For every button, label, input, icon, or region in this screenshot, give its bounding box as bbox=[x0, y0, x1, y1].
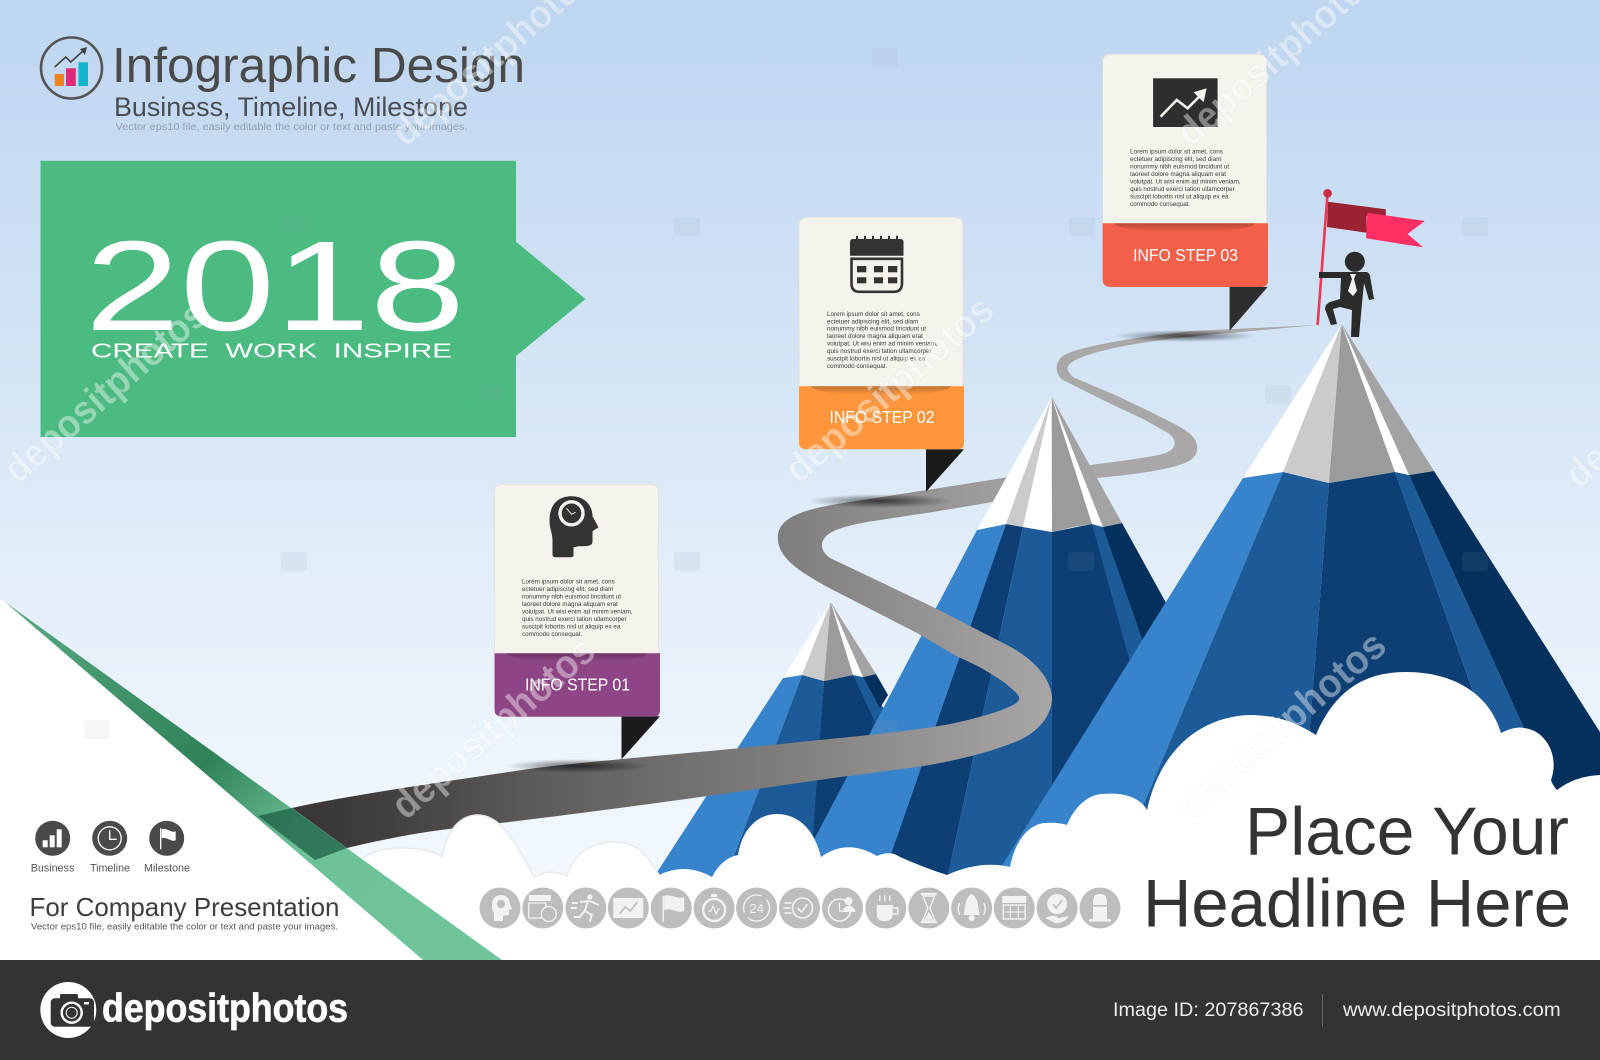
body text: laoreet dolore magna aliquam erat bbox=[827, 333, 923, 340]
card: info step 03 bbox=[1103, 54, 1268, 331]
body text: volutpat. Ut wisi enim ad minim veniam, bbox=[522, 608, 633, 615]
winding road bbox=[292, 325, 1318, 848]
footer bar bbox=[0, 960, 1600, 1060]
icon: calendar bbox=[850, 236, 904, 292]
small mountain bbox=[652, 602, 890, 880]
icon 9: clock with person bbox=[822, 888, 863, 928]
icon 5: flag bbox=[651, 888, 692, 928]
clouds bbox=[340, 672, 1600, 960]
road seen through band bbox=[258, 808, 347, 860]
icon 7: 24 hours bbox=[736, 888, 777, 928]
watermark camera marks bbox=[84, 48, 1488, 739]
body text: ectetuer adipiscing elit, sed diam bbox=[522, 586, 613, 593]
watermark text: depositphotos bbox=[0, 292, 216, 492]
body text: commodo consequat. bbox=[522, 631, 582, 638]
body text: ectetuer adipiscing elit, sed diam bbox=[1130, 156, 1221, 163]
body text: ectetuer adipiscing elit, sed diam bbox=[827, 318, 918, 325]
body text: laoreet dolore magna aliquam erat bbox=[1130, 171, 1226, 178]
step label: INFO STEP 01 bbox=[525, 674, 630, 694]
title: Infographic Design bbox=[112, 39, 525, 93]
icon: businessman bbox=[1319, 252, 1374, 337]
body text: Lorem ipsum dolor sit amet, cons bbox=[827, 311, 920, 318]
icon 15: milestone stone bbox=[1080, 888, 1120, 928]
body text: quis nostrud exerci tation ullamcorper bbox=[827, 348, 932, 355]
big mountain bbox=[993, 324, 1600, 880]
icon 14: hand with clock bbox=[1037, 888, 1078, 928]
icon: flag bbox=[1318, 189, 1425, 325]
row of grey timeline icons bbox=[480, 888, 1120, 928]
white lower left panel bbox=[0, 600, 423, 960]
body text: quis nostrud exerci tation ullamcorper bbox=[1130, 186, 1235, 193]
watermark text: depositphotos bbox=[1168, 623, 1395, 828]
watermark text bbox=[0, 0, 1600, 828]
body text: Lorem ipsum dolor sit amet, cons bbox=[1130, 149, 1223, 156]
body text: Lorem ipsum dolor sit amet, cons bbox=[522, 579, 615, 586]
footer brand name: depositphotos bbox=[102, 986, 348, 1030]
flag and climbing businessman bbox=[1318, 189, 1425, 337]
footer divider bbox=[1322, 994, 1324, 1027]
middle mountain snow cap bbox=[977, 397, 1122, 532]
icon 2: calendar clock bbox=[522, 888, 563, 928]
company presentation heading: For Company Presentation bbox=[30, 892, 340, 922]
body text: nonummy nibh euismod tincidunt ut bbox=[522, 593, 621, 600]
body text: nonummy nibh euismod tincidunt ut bbox=[1130, 163, 1229, 170]
step label: INFO STEP 02 bbox=[830, 407, 934, 427]
small description: Vector eps10 file, easily editable the color or text and paste your images. bbox=[116, 121, 467, 133]
subtitle: Business, Timeline, Milestone bbox=[114, 92, 468, 122]
step label: INFO STEP 03 bbox=[1133, 245, 1238, 265]
body text: volutpat. Ut wisi enim ad minim veniam, bbox=[1130, 178, 1241, 185]
year: 2018 bbox=[85, 215, 465, 358]
label: timeline: Timeline bbox=[90, 863, 130, 875]
body text: suscipit lobortis nisl ut aliquip ex ea bbox=[827, 356, 926, 362]
icon 6: stopwatch bbox=[694, 888, 735, 928]
green year banner bbox=[40, 161, 586, 437]
headline line 2: Headline Here bbox=[1143, 866, 1571, 942]
icon 1: head bbox=[480, 888, 520, 928]
headline line 1: Place Your bbox=[1245, 793, 1569, 869]
footer website: www.depositphotos.com bbox=[1342, 999, 1561, 1021]
green diagonal band bbox=[5, 602, 502, 960]
body text: laoreet dolore magna aliquam erat bbox=[522, 601, 618, 608]
watermark text: depositphotos bbox=[383, 628, 604, 828]
icon 10: coffee cup bbox=[865, 888, 906, 928]
icon 4: chart bbox=[608, 888, 649, 928]
icon 13: calendar bbox=[994, 888, 1035, 928]
pale cloud outline bbox=[360, 815, 659, 877]
body text: quis nostrud exerci tation ullamcorper bbox=[522, 616, 627, 623]
icon 11: hourglass bbox=[908, 888, 949, 928]
label: milestone: Milestone bbox=[144, 863, 190, 875]
icon: growth chart bbox=[1153, 78, 1218, 127]
icon 3: runner bbox=[565, 888, 606, 928]
middle mountain body bbox=[798, 523, 1170, 880]
icon: timeline bbox=[92, 821, 127, 856]
icon 8: fast check bbox=[779, 888, 820, 928]
icon 7: 24 hours: 24 bbox=[749, 901, 764, 916]
footer logo bbox=[40, 982, 96, 1038]
body text: volutpat. Ut wisi enim ad minim veniam, bbox=[827, 341, 938, 348]
card: info step 02 bbox=[799, 217, 964, 492]
tagline: CREATE WORK INSPIRE bbox=[91, 341, 452, 363]
body text: commodo consequat. bbox=[1130, 201, 1191, 208]
road shadows under pins bbox=[506, 330, 1255, 773]
logo icon bbox=[41, 38, 102, 98]
company description: Vector eps10 file, easily editable the color or text and paste your images. bbox=[31, 921, 338, 932]
icon: milestone bbox=[149, 821, 184, 856]
card: info step 01 bbox=[494, 484, 660, 759]
icon: head with clock bbox=[550, 496, 598, 557]
body text: nonummy nibh euismod tincidunt ut bbox=[827, 326, 926, 333]
watermark text: depositphotos bbox=[776, 287, 1003, 492]
icon: business bbox=[35, 821, 70, 856]
body text: commodo consequat. bbox=[827, 363, 887, 370]
label: business: Business bbox=[31, 863, 75, 875]
mountains bbox=[652, 324, 1600, 880]
body text: suscipit lobortis nisl ut aliquip ex ea bbox=[1130, 193, 1229, 200]
footer image id: Image ID: 207867386 bbox=[1113, 999, 1304, 1021]
body text: suscipit lobortis nisl ut aliquip ex ea bbox=[522, 623, 621, 630]
small icons: business, timeline, milestone bbox=[31, 821, 190, 875]
icon 12: bell bbox=[951, 888, 992, 928]
